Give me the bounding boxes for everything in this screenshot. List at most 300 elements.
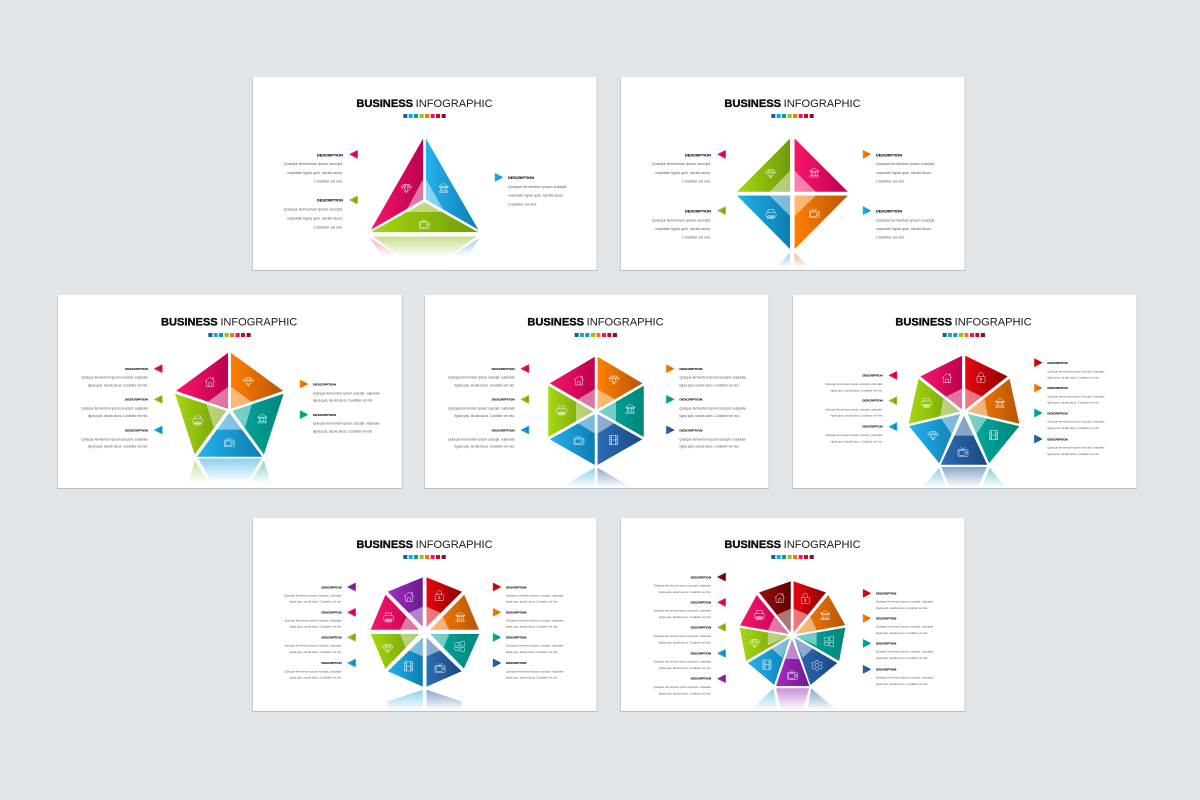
title: INFOGRAPHIC xyxy=(784,98,861,110)
text block: right 1: DESCRIPTION xyxy=(1047,361,1068,365)
text block: left 3: Quisque fermentum ipsum suscipit, vulputate xyxy=(654,634,711,638)
segment: green diamond xyxy=(739,627,789,661)
text block: left 1 xyxy=(825,374,883,392)
segment: blue film xyxy=(387,637,423,687)
text block: right 3: ligula quis, iaculis lacus. Curabitur vel nisi. xyxy=(506,650,558,654)
text block: left 2: DESCRIPTION xyxy=(317,199,344,203)
hexagon chart xyxy=(548,356,644,488)
text block: right 2: ligula quis, iaculis lacus. Curabitur vel nisi. xyxy=(876,631,928,635)
segment: pink house xyxy=(920,355,962,410)
text block: right 2: Quisque fermentum ipsum suscipit, vulputate xyxy=(313,422,380,426)
arrow: red xyxy=(863,590,870,597)
arrow: orange xyxy=(1035,384,1042,392)
text block: left 1 xyxy=(284,153,344,184)
text block: right 3: DESCRIPTION xyxy=(1047,411,1068,415)
text block: left 2: Curabitur vel nisi. xyxy=(682,236,711,240)
arrow: teal xyxy=(300,411,307,418)
text block: left 3 xyxy=(284,635,342,654)
text block: left 3: ligula quis, iaculis lacus. Curabitur vel nisi. xyxy=(290,650,342,654)
text block: right 3: Quisque fermentum ipsum suscipit, vulputate xyxy=(1047,420,1105,424)
title xyxy=(724,98,861,118)
text block: left 1: DESCRIPTION xyxy=(862,374,883,378)
text block: right 1: ligula quis, iaculis lacus. Curabitur vel nisi. xyxy=(313,399,373,403)
arrow: teal xyxy=(493,634,500,641)
panel: pentagon slide xyxy=(57,295,402,489)
text block: left 3: Quisque fermentum ipsum suscipit, vulputate xyxy=(81,437,148,441)
text block: right 1: Quisque fermentum ipsum suscipit, vulputate xyxy=(1047,369,1105,373)
text block: right 4: DESCRIPTION xyxy=(876,667,896,671)
text block: right 1: Curabitur vel nisi. xyxy=(508,202,537,206)
text block: left 3: Quisque fermentum ipsum suscipit, vulputate xyxy=(284,644,342,648)
text block: right 1 xyxy=(1047,361,1105,380)
title: BUSINESS xyxy=(356,539,413,551)
text block: right 2 xyxy=(1047,386,1105,405)
text block: left 4: Quisque fermentum ipsum suscipit, vulputate xyxy=(284,669,342,673)
text block: right 2: Quisque fermentum ipsum suscipit, xyxy=(876,218,935,222)
segment: green printer xyxy=(175,393,227,455)
title: BUSINESS xyxy=(724,98,781,110)
text block: right 1: ligula quis, iaculis lacus. Curabitur vel nisi. xyxy=(876,606,928,610)
arrow: blue xyxy=(863,207,870,214)
text block: right 2: ligula quis, iaculis lacus. Curabitur vel nisi. xyxy=(506,625,558,629)
text block: right 1: Quisque fermentum ipsum suscipit, vulputate xyxy=(506,593,564,597)
text block: left 2: DESCRIPTION xyxy=(492,398,515,402)
panel: octagon slide xyxy=(252,518,597,712)
text block: right 1: vulputate ligula quis, iaculis lacus. xyxy=(876,171,932,175)
text block: left 2 xyxy=(81,398,149,418)
arrow: orange xyxy=(300,380,307,388)
text block: left 3: ligula quis, iaculis lacus. Curabitur vel nisi. xyxy=(831,439,883,443)
text block: left 1: DESCRIPTION xyxy=(691,575,711,579)
text block: left 2: Quisque fermentum ipsum suscipit, xyxy=(284,208,343,212)
segment: teal film xyxy=(967,414,1020,464)
text block: right 2: DESCRIPTION xyxy=(313,413,337,417)
text block: left 2 xyxy=(284,199,344,229)
title: BUSINESS xyxy=(161,317,218,329)
segment: green tv xyxy=(370,202,479,232)
text block: right 1: DESCRIPTION xyxy=(876,153,903,157)
heptagon chart xyxy=(908,355,1020,488)
text block: left 3: ligula quis, iaculis lacus. Curabitur vel nisi. xyxy=(659,640,711,644)
arrow: green xyxy=(718,207,725,214)
arrow: pink xyxy=(155,365,162,372)
text block: right 1: ligula quis, iaculis lacus. Curabitur vel nisi. xyxy=(679,383,739,387)
arrow: maroon xyxy=(718,573,725,581)
text block: right 1: vulputate ligula quis, iaculis lacus. xyxy=(508,194,564,198)
text block: right 4 xyxy=(876,667,934,686)
reflection xyxy=(387,689,462,711)
text block: left 1: vulputate ligula quis, iaculis lacus. xyxy=(287,171,343,175)
text block: right 1: DESCRIPTION xyxy=(508,176,535,180)
segment: orange diamond xyxy=(231,352,284,409)
segment: orange bank xyxy=(795,595,846,634)
segment: orange diamond xyxy=(597,356,643,410)
arrow: blue xyxy=(495,174,502,181)
segment: green printer xyxy=(548,385,594,437)
segment: red lock xyxy=(426,577,462,627)
text block: left 4 xyxy=(654,651,711,670)
arrow: teal xyxy=(667,396,674,403)
arrow: teal xyxy=(863,640,870,647)
text block: right 1: Quisque fermentum ipsum suscipit, vulputate xyxy=(313,391,380,395)
text block: left 2: DESCRIPTION xyxy=(691,600,711,604)
text block: right 1: Quisque fermentum ipsum suscipit, vulputate xyxy=(679,376,746,380)
title xyxy=(161,317,297,337)
text block: left 4: DESCRIPTION xyxy=(691,651,711,655)
text block: right 3 xyxy=(1047,411,1105,430)
segment: navy film xyxy=(597,414,643,465)
text block: right 2 xyxy=(506,610,564,629)
text block: left 1 xyxy=(448,367,515,387)
nonagon chart xyxy=(739,581,846,711)
text block: left 3: Quisque fermentum ipsum suscipit, vulputate xyxy=(448,437,515,441)
text block: right 2: DESCRIPTION xyxy=(1047,386,1068,390)
text block: left 2: ligula quis, iaculis lacus. Curabitur vel nisi. xyxy=(659,615,711,619)
text block: left 2: DESCRIPTION xyxy=(321,610,342,614)
text block: right 4: DESCRIPTION xyxy=(1047,437,1068,441)
text block: right 1 xyxy=(313,383,380,403)
text block: right 1: Curabitur vel nisi. xyxy=(876,180,905,184)
segment: pink printer xyxy=(740,595,790,634)
text block: left 2: ligula quis, iaculis lacus. Curabitur vel nisi. xyxy=(88,414,148,418)
arrow: purple xyxy=(348,583,355,591)
text block: left 1: Curabitur vel nisi. xyxy=(314,180,343,184)
arrow: pink xyxy=(718,151,725,158)
reflection xyxy=(749,688,838,711)
arrow: navy xyxy=(1035,435,1042,443)
text block: left 2: Quisque fermentum ipsum suscipit, vulputate xyxy=(825,407,883,411)
text block: left 2 xyxy=(825,399,883,417)
text block: right 4: ligula quis, iaculis lacus. Curabitur vel nisi. xyxy=(506,676,558,680)
text block: left 4 xyxy=(284,661,342,680)
text block: left 1: vulputate ligula quis, iaculis lacus. xyxy=(655,171,711,175)
text block: right 4: DESCRIPTION xyxy=(506,661,526,665)
arrow: pink xyxy=(350,151,357,158)
segment: green diamond xyxy=(370,634,420,669)
text block: left 2 xyxy=(654,600,711,619)
arrow: red xyxy=(493,583,500,591)
arrow: pink xyxy=(348,609,355,616)
arrow: green xyxy=(155,396,162,403)
segment: purple tv xyxy=(776,639,810,686)
text block: right 3 xyxy=(876,641,934,660)
text block: left 3: DESCRIPTION xyxy=(691,625,711,629)
segment: teal bank xyxy=(232,393,284,455)
octagon chart xyxy=(370,577,480,711)
text block: left 2: Quisque fermentum ipsum suscipit, vulputate xyxy=(448,407,515,411)
segment: blue film xyxy=(748,637,790,685)
arrow: blue xyxy=(521,426,529,434)
text block: left 3 xyxy=(825,425,883,443)
text block: right 4 xyxy=(506,661,564,680)
text block: right 2: DESCRIPTION xyxy=(876,209,903,213)
segment: navy gear xyxy=(794,637,838,685)
arrow: pink xyxy=(521,365,529,372)
title: INFOGRAPHIC xyxy=(416,98,493,110)
text block: left 3: DESCRIPTION xyxy=(321,635,342,639)
text block: right 4 xyxy=(1047,437,1105,456)
segment: pink house xyxy=(549,356,595,410)
text block: right 3: ligula quis, iaculis lacus. Curabitur vel nisi. xyxy=(679,445,739,449)
reflection xyxy=(370,236,480,257)
arrow: green xyxy=(350,196,357,204)
text block: left 5: DESCRIPTION xyxy=(691,677,711,681)
segment: blue bank xyxy=(426,138,479,230)
text block: right 1 xyxy=(508,176,567,206)
text block: right 2: Curabitur vel nisi. xyxy=(876,236,905,240)
text block: left 2: DESCRIPTION xyxy=(862,399,883,403)
panel: nonagon slide xyxy=(620,518,965,712)
text block: right 2: vulputate ligula quis, iaculis lacus. xyxy=(876,227,932,231)
text block: left 2: Quisque fermentum ipsum suscipit, xyxy=(652,218,711,222)
text block: left 3: Quisque fermentum ipsum suscipit, vulputate xyxy=(825,433,883,437)
text block: left 1: ligula quis, iaculis lacus. Curabitur vel nisi. xyxy=(831,388,883,392)
text block: right 2: ligula quis, iaculis lacus. Curabitur vel nisi. xyxy=(1047,401,1100,405)
text block: right 1: ligula quis, iaculis lacus. Curabitur vel nisi. xyxy=(506,600,558,604)
text block: right 2 xyxy=(876,616,934,635)
text block: right 1: ligula quis, iaculis lacus. Curabitur vel nisi. xyxy=(1047,376,1100,380)
segment: pink diamond xyxy=(370,138,423,230)
pentagon chart xyxy=(175,352,284,483)
text block: left 3: DESCRIPTION xyxy=(862,425,883,429)
segment: green diamond xyxy=(737,138,790,192)
text block: right 1: DESCRIPTION xyxy=(506,585,526,589)
text block: left 1: Quisque fermentum ipsum suscipit, vulputate xyxy=(825,382,883,386)
text block: left 2: ligula quis, iaculis lacus. Curabitur vel nisi. xyxy=(455,414,515,418)
triangle chart xyxy=(370,138,480,257)
text block: left 1: Quisque fermentum ipsum suscipit, vulputate xyxy=(81,376,148,380)
text block: right 4: Quisque fermentum ipsum suscipit, vulputate xyxy=(876,676,934,680)
segment: pink house xyxy=(176,352,228,409)
text block: right 2: Quisque fermentum ipsum suscipit, vulputate xyxy=(1047,394,1105,398)
text block: left 1: ligula quis, iaculis lacus. Curabitur vel nisi. xyxy=(659,590,711,594)
title: INFOGRAPHIC xyxy=(587,317,664,329)
text block: left 4: ligula quis, iaculis lacus. Curabitur vel nisi. xyxy=(659,666,711,670)
text block: right 2 xyxy=(679,398,746,418)
title xyxy=(356,539,493,559)
panel: triangle slide xyxy=(252,77,597,271)
arrow: green xyxy=(889,397,897,404)
text block: left 2 xyxy=(284,610,342,629)
text block: right 2: Quisque fermentum ipsum suscipit, vulputate xyxy=(876,625,934,629)
reflection xyxy=(922,467,1006,488)
arrow: blue xyxy=(889,423,897,430)
title: BUSINESS xyxy=(724,539,781,551)
title xyxy=(895,317,1032,337)
text block: left 3: DESCRIPTION xyxy=(125,428,149,432)
text block: right 2: Quisque fermentum ipsum suscipit, vulputate xyxy=(679,407,746,411)
segment: teal windows xyxy=(795,627,846,661)
reflection xyxy=(776,252,809,268)
text block: right 2: DESCRIPTION xyxy=(679,398,703,402)
segment: orange bank xyxy=(967,378,1020,424)
text block: right 4: Quisque fermentum ipsum suscipit, vulputate xyxy=(1047,445,1105,449)
panel: diamond slide xyxy=(620,77,965,271)
title: BUSINESS xyxy=(527,317,584,329)
segment: pink printer xyxy=(370,594,420,630)
segment: blue diamond xyxy=(909,414,961,464)
text block: left 3 xyxy=(654,625,711,644)
text block: left 1: Quisque fermentum ipsum suscipit, vulputate xyxy=(654,584,711,588)
text block: left 2: ligula quis, iaculis lacus. Curabitur vel nisi. xyxy=(290,625,342,629)
text block: right 2: DESCRIPTION xyxy=(506,610,526,614)
text block: left 2: Quisque fermentum ipsum suscipit, vulputate xyxy=(81,407,148,411)
segment: orange tv xyxy=(794,195,848,250)
text block: right 2 xyxy=(313,413,380,433)
text block: right 2 xyxy=(876,209,935,240)
segment: red lock xyxy=(793,581,826,633)
text block: right 1 xyxy=(876,591,934,610)
text block: left 3: ligula quis, iaculis lacus. Curabitur vel nisi. xyxy=(455,445,515,449)
text block: right 2: ligula quis, iaculis lacus. Curabitur vel nisi. xyxy=(313,429,373,433)
text block: left 5: ligula quis, iaculis lacus. Curabitur vel nisi. xyxy=(659,691,711,695)
text block: right 1 xyxy=(679,367,746,387)
text block: right 3 xyxy=(679,428,746,449)
text block: right 1: Quisque fermentum ipsum suscipit, vulputate xyxy=(876,600,934,604)
title xyxy=(724,539,861,559)
arrow: green xyxy=(348,634,355,641)
text block: right 1: Quisque fermentum ipsum suscipit, xyxy=(508,185,567,189)
reflection xyxy=(188,458,271,483)
text block: left 4: Quisque fermentum ipsum suscipit, vulputate xyxy=(654,660,711,664)
text block: right 3: ligula quis, iaculis lacus. Curabitur vel nisi. xyxy=(876,656,928,660)
diamond chart xyxy=(737,138,848,268)
arrow: navy xyxy=(493,659,500,667)
text block: left 1 xyxy=(284,585,342,604)
text block: right 1 xyxy=(876,153,935,184)
text block: left 2: DESCRIPTION xyxy=(685,209,712,213)
segment: blue printer xyxy=(737,195,790,250)
segment: navy tv xyxy=(940,415,988,465)
text block: left 2: ligula quis, iaculis lacus. Curabitur vel nisi. xyxy=(831,413,883,417)
title: INFOGRAPHIC xyxy=(220,317,297,329)
arrow: orange xyxy=(863,151,870,158)
text block: left 2 xyxy=(448,398,515,418)
text block: right 3: Quisque fermentum ipsum suscipit, vulputate xyxy=(506,644,564,648)
text block: left 4: ligula quis, iaculis lacus. Curabitur vel nisi. xyxy=(290,676,342,680)
text block: left 3 xyxy=(81,428,149,449)
text block: left 1: DESCRIPTION xyxy=(125,367,149,371)
arrow: orange xyxy=(493,609,500,616)
text block: left 2: Quisque fermentum ipsum suscipit, vulputate xyxy=(284,618,342,622)
segment: teal windows xyxy=(430,634,480,669)
text block: left 1: Curabitur vel nisi. xyxy=(682,180,711,184)
segment: purple house xyxy=(387,577,423,627)
title: INFOGRAPHIC xyxy=(416,539,493,551)
segment: navy tv xyxy=(426,637,462,687)
reflection xyxy=(560,467,632,488)
text block: right 2: ligula quis, iaculis lacus. Curabitur vel nisi. xyxy=(679,414,739,418)
arrow: teal xyxy=(1035,409,1042,417)
text block: left 1: ligula quis, iaculis lacus. Curabitur vel nisi. xyxy=(455,383,515,387)
arrow: pink xyxy=(718,599,725,606)
text block: right 4: ligula quis, iaculis lacus. Curabitur vel nisi. xyxy=(876,682,928,686)
text block: left 1: Quisque fermentum ipsum suscipit, vulputate xyxy=(284,593,342,597)
segment: teal bank xyxy=(598,385,644,437)
text block: right 1 xyxy=(506,585,564,604)
text block: right 2: DESCRIPTION xyxy=(876,616,896,620)
text block: left 2: Quisque fermentum ipsum suscipit, vulputate xyxy=(654,609,711,613)
title: BUSINESS xyxy=(895,317,952,329)
text block: left 1: DESCRIPTION xyxy=(317,153,344,157)
text block: left 3: DESCRIPTION xyxy=(492,428,515,432)
arrow: green xyxy=(718,624,725,631)
text block: right 4: ligula quis, iaculis lacus. Curabitur vel nisi. xyxy=(1047,452,1100,456)
text block: right 3: DESCRIPTION xyxy=(506,635,526,639)
segment: red lock xyxy=(965,355,1008,410)
arrow: navy xyxy=(863,666,870,673)
text block: left 1: DESCRIPTION xyxy=(321,585,342,589)
arrow: blue xyxy=(155,426,162,434)
text block: right 3: ligula quis, iaculis lacus. Curabitur vel nisi. xyxy=(1047,426,1100,430)
arrow: blue xyxy=(348,659,355,667)
title: BUSINESS xyxy=(356,98,413,110)
arrow: blue xyxy=(718,650,725,657)
text block: left 1: Quisque fermentum ipsum suscipit, xyxy=(284,162,343,166)
text block: left 1: Quisque fermentum ipsum suscipit, vulputate xyxy=(448,376,515,380)
arrow: pink xyxy=(889,372,897,379)
segment: maroon house xyxy=(759,581,791,633)
arrow: navy xyxy=(667,426,674,434)
title xyxy=(527,317,664,337)
text block: left 2 xyxy=(652,209,712,240)
text block: right 3: Quisque fermentum ipsum suscipit, vulputate xyxy=(679,437,746,441)
text block: right 4: Quisque fermentum ipsum suscipit, vulputate xyxy=(506,669,564,673)
text block: left 2: vulputate ligula quis, iaculis lacus. xyxy=(287,217,343,221)
panel: hexagon slide xyxy=(424,295,769,489)
segment: pink bank xyxy=(794,138,848,192)
text block: left 2: vulputate ligula quis, iaculis lacus. xyxy=(655,227,711,231)
text block: left 4: DESCRIPTION xyxy=(321,661,342,665)
text block: left 1 xyxy=(652,153,712,184)
text block: right 3: DESCRIPTION xyxy=(876,641,896,645)
text block: right 1: Quisque fermentum ipsum suscipit, xyxy=(876,162,935,166)
segment: green printer xyxy=(908,378,961,424)
text block: right 1: DESCRIPTION xyxy=(876,591,896,595)
text block: left 1: DESCRIPTION xyxy=(685,153,712,157)
text block: right 2: Quisque fermentum ipsum suscipit, vulputate xyxy=(506,618,564,622)
arrow: orange xyxy=(667,365,674,372)
text block: right 3: DESCRIPTION xyxy=(679,428,703,432)
arrow: green xyxy=(521,396,529,403)
text block: left 1: ligula quis, iaculis lacus. Curabitur vel nisi. xyxy=(88,383,148,387)
text block: left 1 xyxy=(654,575,711,594)
text block: left 1 xyxy=(81,367,149,387)
panel: heptagon slide xyxy=(792,295,1137,489)
text block: left 1: DESCRIPTION xyxy=(492,367,515,371)
arrow: orange xyxy=(863,615,870,622)
text block: left 3 xyxy=(448,428,515,449)
text block: left 5: Quisque fermentum ipsum suscipit, vulputate xyxy=(654,685,711,689)
arrow: purple xyxy=(718,675,725,682)
text block: left 2: DESCRIPTION xyxy=(125,398,149,402)
text block: right 3 xyxy=(506,635,564,654)
segment: orange bank xyxy=(430,594,479,630)
title: INFOGRAPHIC xyxy=(784,539,861,551)
segment: blue tv xyxy=(197,412,263,457)
text block: left 1: ligula quis, iaculis lacus. Curabitur vel nisi. xyxy=(290,600,342,604)
text block: right 3: Quisque fermentum ipsum suscipit, vulputate xyxy=(876,650,934,654)
text block: left 1: Quisque fermentum ipsum suscipit, xyxy=(652,162,711,166)
title xyxy=(356,98,493,118)
text block: right 1: DESCRIPTION xyxy=(313,383,337,387)
segment: blue tv xyxy=(549,414,595,465)
text block: left 2: Curabitur vel nisi. xyxy=(314,225,343,229)
arrow: red xyxy=(1035,359,1042,366)
title: INFOGRAPHIC xyxy=(955,317,1032,329)
text block: left 3: ligula quis, iaculis lacus. Curabitur vel nisi. xyxy=(88,445,148,449)
text block: left 5 xyxy=(654,677,711,695)
